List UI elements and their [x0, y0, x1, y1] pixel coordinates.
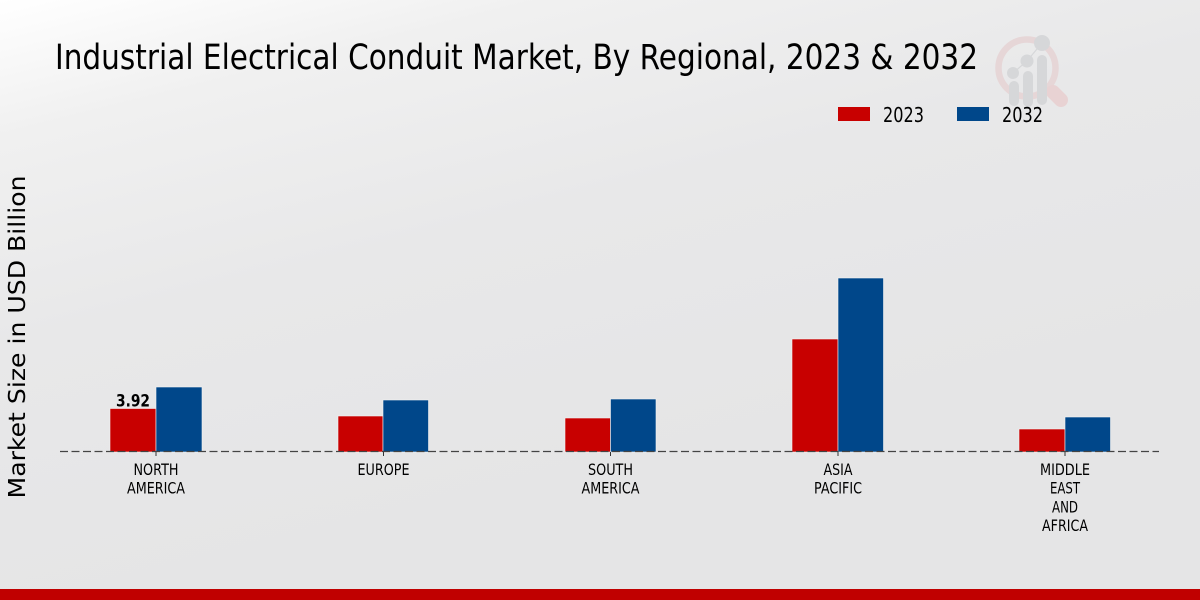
x axis label: North America — [127, 460, 185, 498]
x axis label: North America: NORTH — [134, 460, 178, 479]
x axis label: North America: AMERICA — [127, 478, 185, 498]
legend: 2023 — [838, 103, 924, 127]
x axis label: South America — [582, 460, 640, 498]
baseline — [60, 450, 1159, 452]
title: Industrial Electrical Conduit Market, By Regional, 2023 & 2032 — [55, 38, 978, 78]
x axis label: Middle East and Africa: MIDDLE — [1040, 460, 1090, 479]
bars: North America — [110, 387, 202, 456]
x axis label: Asia Pacific: PACIFIC — [814, 478, 862, 498]
x axis label: Middle East and Africa — [1040, 460, 1090, 535]
bars: Middle East and Africa — [1019, 417, 1110, 456]
legend: 2032: 2032 — [1002, 103, 1043, 127]
x axis label: Europe: EUROPE — [358, 460, 410, 479]
y axis label: Market Size in USD Billion — [3, 176, 31, 498]
x axis label: Middle East and Africa: AFRICA — [1042, 516, 1088, 535]
icon: watermark logo — [998, 35, 1061, 107]
x axis label: Asia Pacific: ASIA — [824, 460, 853, 479]
x axis label: Asia Pacific — [814, 460, 862, 498]
x axis label: South America: SOUTH — [588, 460, 633, 479]
x axis label: Middle East and Africa: EAST — [1050, 478, 1080, 498]
x axis label: Middle East and Africa: AND — [1052, 498, 1078, 516]
bars: South America — [565, 399, 656, 456]
bar chart — [60, 278, 1159, 456]
legend: 2032 — [957, 103, 1043, 127]
bars: Asia Pacific — [792, 278, 884, 456]
bars: Europe — [338, 400, 428, 456]
x axis label: South America: AMERICA — [582, 478, 640, 498]
legend: 2023: 2023 — [883, 103, 924, 127]
legend — [838, 103, 1043, 127]
data label: 3.92: 3.92 — [116, 392, 150, 412]
footer bar — [0, 589, 1200, 600]
